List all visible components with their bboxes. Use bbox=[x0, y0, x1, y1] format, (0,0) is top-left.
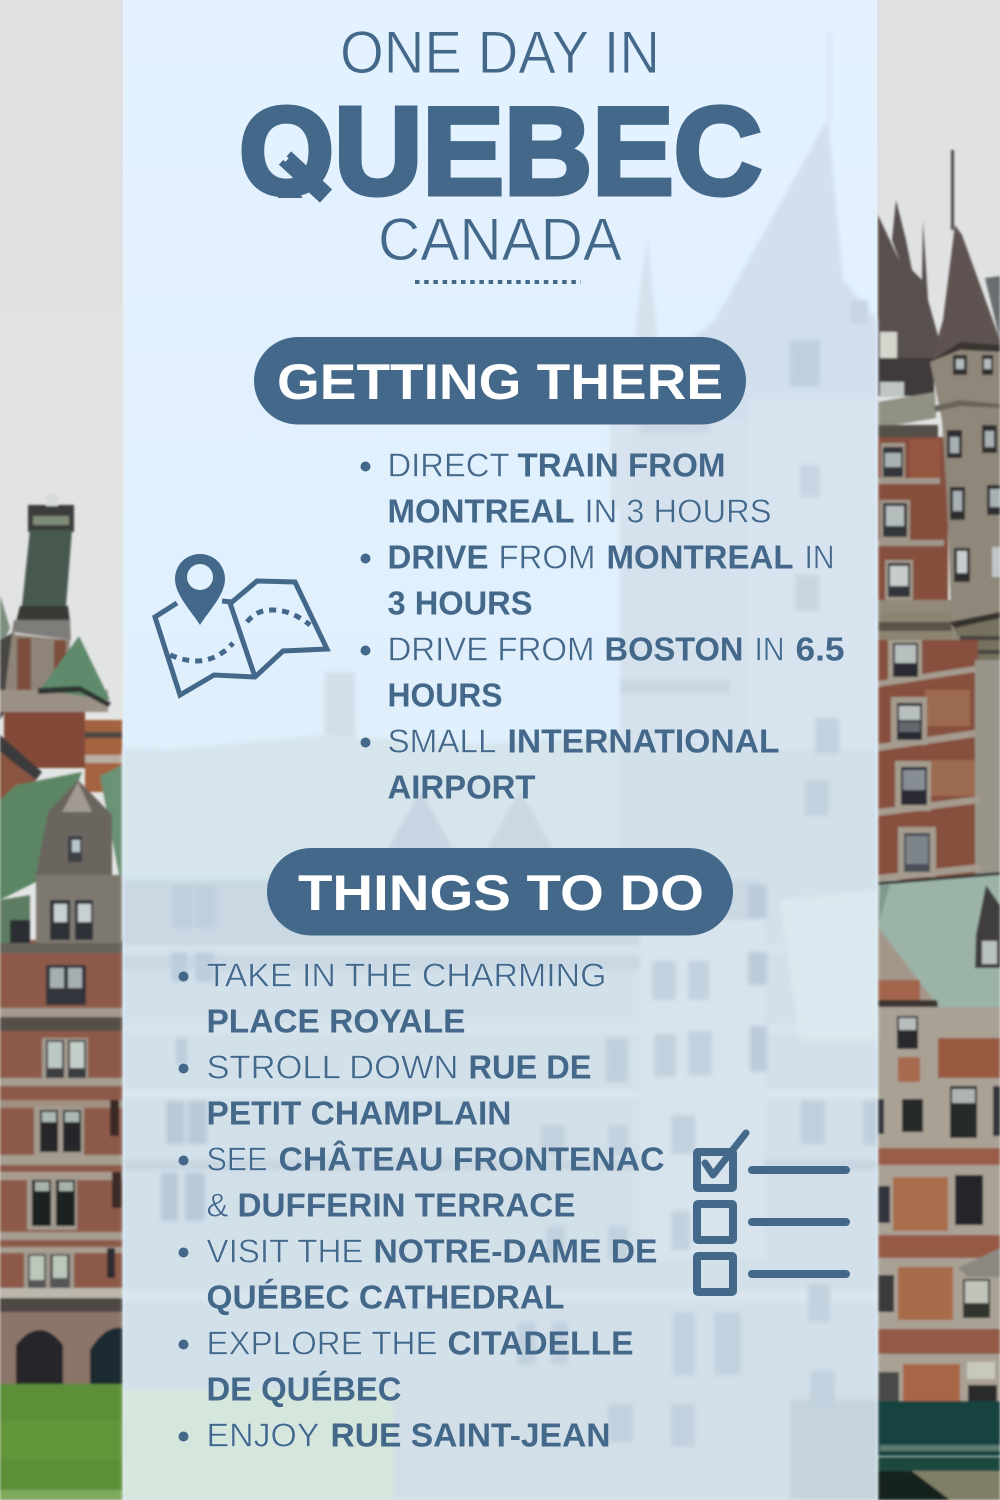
item: chateau frontenac: DUFFERIN TERRACE bbox=[238, 1186, 576, 1224]
item: drive from boston: BOSTON bbox=[604, 630, 744, 668]
item: rue saint-jean: ENJOY bbox=[206, 1416, 320, 1454]
item: drive from montreal: FROM bbox=[498, 538, 596, 576]
item: small airport: SMALL bbox=[388, 722, 496, 760]
heading pill: things to do: THINGS TO DO bbox=[298, 865, 704, 921]
item: chateau frontenac: & bbox=[206, 1186, 228, 1224]
item: drive from boston: HOURS bbox=[388, 676, 502, 714]
item: rue saint-jean bbox=[178, 1416, 610, 1454]
item: citadelle: DE QUÉBEC bbox=[206, 1370, 402, 1408]
item: drive from boston: 6.5 bbox=[796, 630, 844, 668]
item: rue de petit champlain: PETIT CHAMPLAIN bbox=[206, 1094, 512, 1132]
list: getting there bbox=[360, 446, 844, 806]
item: direct train bbox=[360, 446, 772, 530]
item: direct train: DIRECT bbox=[388, 446, 510, 484]
background photo: left wing of the chateau bbox=[0, 494, 123, 1500]
item: drive from montreal: 3 HOURS bbox=[388, 584, 532, 622]
item: rue de petit champlain bbox=[178, 1048, 592, 1132]
item: drive from montreal: MONTREAL bbox=[606, 538, 794, 576]
item: small airport bbox=[360, 722, 780, 806]
item: citadelle bbox=[178, 1324, 634, 1408]
item: rue saint-jean: RUE SAINT-JEAN bbox=[330, 1416, 610, 1454]
item: place royale: TAKE IN THE CHARMING bbox=[206, 956, 606, 994]
item: direct train: TRAIN FROM bbox=[518, 446, 726, 484]
item: notre-dame cathedral: VISIT THE bbox=[206, 1232, 364, 1270]
item: place royale bbox=[178, 956, 606, 1040]
item: notre-dame cathedral bbox=[178, 1232, 658, 1316]
item: drive from boston: IN bbox=[754, 630, 784, 668]
item: drive from montreal: IN bbox=[804, 538, 834, 576]
item: direct train: MONTREAL bbox=[388, 492, 574, 530]
title: CANADA bbox=[378, 206, 622, 273]
item: citadelle: CITADELLE bbox=[448, 1324, 634, 1362]
title: QUEBEC bbox=[239, 83, 762, 221]
background photo: right tower of the chateau bbox=[878, 150, 1000, 1500]
item: drive from montreal: DRIVE bbox=[388, 538, 488, 576]
icon: map with location pin bbox=[155, 554, 327, 695]
item: notre-dame cathedral: NOTRE-DAME DE bbox=[374, 1232, 658, 1270]
icon: checklist bbox=[697, 1133, 846, 1292]
item: small airport: AIRPORT bbox=[388, 768, 536, 806]
item: small airport: INTERNATIONAL bbox=[508, 722, 780, 760]
item: notre-dame cathedral: QUÉBEC CATHEDRAL bbox=[206, 1278, 564, 1316]
title bbox=[242, 31, 762, 260]
title: ONE DAY IN bbox=[340, 19, 660, 86]
item: drive from boston: DRIVE FROM bbox=[388, 630, 594, 668]
item: drive from boston bbox=[360, 630, 844, 714]
heading pill: getting there bbox=[254, 337, 746, 424]
item: chateau frontenac: SEE bbox=[206, 1140, 268, 1178]
item: chateau frontenac: CHÂTEAU FRONTENAC bbox=[278, 1140, 664, 1178]
dotted divider bbox=[415, 280, 581, 284]
item: place royale: PLACE ROYALE bbox=[206, 1002, 466, 1040]
item: rue de petit champlain: STROLL DOWN bbox=[206, 1048, 458, 1086]
item: direct train: IN 3 HOURS bbox=[584, 492, 772, 530]
heading pill: getting there: GETTING THERE bbox=[277, 354, 723, 410]
item: rue de petit champlain: RUE DE bbox=[468, 1048, 592, 1086]
list: things to do bbox=[178, 956, 664, 1454]
item: drive from montreal bbox=[360, 538, 834, 622]
translucent text panel with ghosted chateau bbox=[123, 0, 877, 1500]
heading pill: things to do bbox=[267, 848, 733, 936]
item: citadelle: EXPLORE THE bbox=[206, 1324, 438, 1362]
item: chateau frontenac bbox=[178, 1140, 664, 1224]
